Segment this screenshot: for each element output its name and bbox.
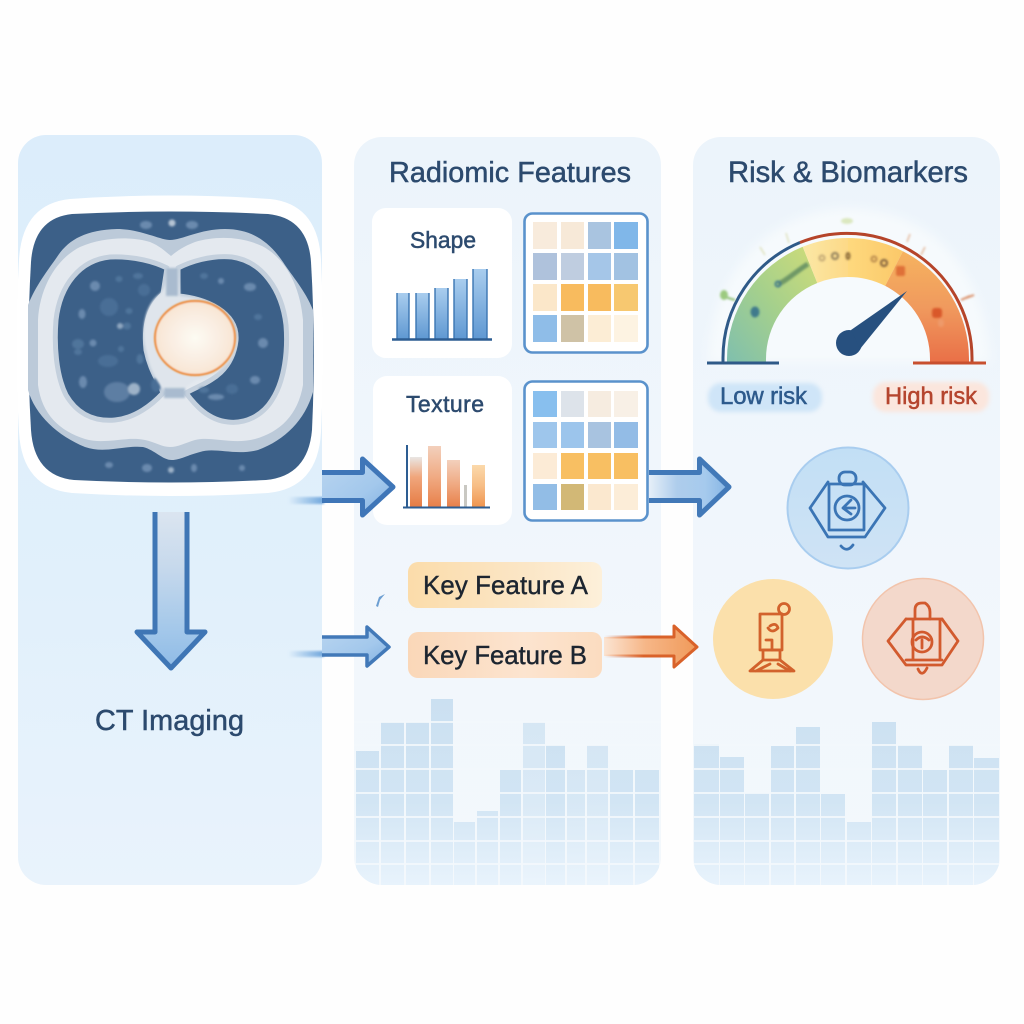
Texture label: Texture	[406, 391, 484, 417]
icon: red biomarker	[888, 603, 958, 673]
background histogram	[693, 722, 1000, 885]
pill: Key Feature B: Key Feature B	[423, 642, 587, 670]
gauge segments	[727, 238, 969, 363]
Risk and Biomarkers title: Risk & Biomarkers	[728, 157, 968, 189]
panel: CT imaging	[16, 135, 323, 885]
icon: blue biomarker	[810, 472, 885, 549]
lungs	[55, 257, 287, 422]
biomarker: orange circle	[713, 579, 833, 699]
card: texture	[373, 376, 512, 525]
label: Low risk: Low risk	[720, 383, 808, 410]
panel: radiomic features	[354, 137, 661, 885]
mediastinum and trachea	[144, 268, 237, 392]
background histogram	[354, 699, 661, 885]
small tick mark	[376, 594, 385, 607]
pill: Key Feature A	[408, 562, 602, 608]
gauge rim	[707, 233, 986, 363]
lung nodules	[72, 220, 268, 473]
CT Imaging label: CT Imaging	[95, 705, 244, 737]
gauge	[707, 208, 990, 363]
heatmap: shape	[524, 214, 648, 352]
arrow: CT down	[137, 512, 205, 668]
tumour mass	[155, 301, 235, 375]
arrow: key feature to biomarkers	[604, 626, 697, 667]
panel: risk and biomarkers	[693, 137, 1000, 885]
Shape label: Shape	[410, 227, 476, 253]
card: shape	[372, 208, 512, 358]
gauge needle	[836, 291, 907, 356]
bar chart: shape	[392, 269, 492, 340]
pill: Key Feature B	[408, 632, 602, 678]
arrow: heatmap to risk	[649, 459, 729, 515]
arrow: CT to key feature	[288, 627, 389, 666]
label: High risk: High risk	[885, 384, 977, 410]
arrow: CT to features	[288, 459, 393, 515]
Radiomic Features title: Radiomic Features	[389, 157, 631, 189]
CT scan image	[16, 196, 323, 496]
bar chart: texture	[403, 445, 490, 508]
pill: Key Feature A: Key Feature A	[423, 572, 589, 600]
biomarker: blue circle	[788, 448, 908, 568]
heatmap: texture	[524, 382, 648, 520]
gauge marks	[720, 218, 974, 327]
gauge glow	[708, 208, 990, 363]
biomarker: red circle	[862, 578, 984, 700]
icon: orange biomarker	[750, 604, 794, 671]
label: High risk	[873, 382, 989, 412]
